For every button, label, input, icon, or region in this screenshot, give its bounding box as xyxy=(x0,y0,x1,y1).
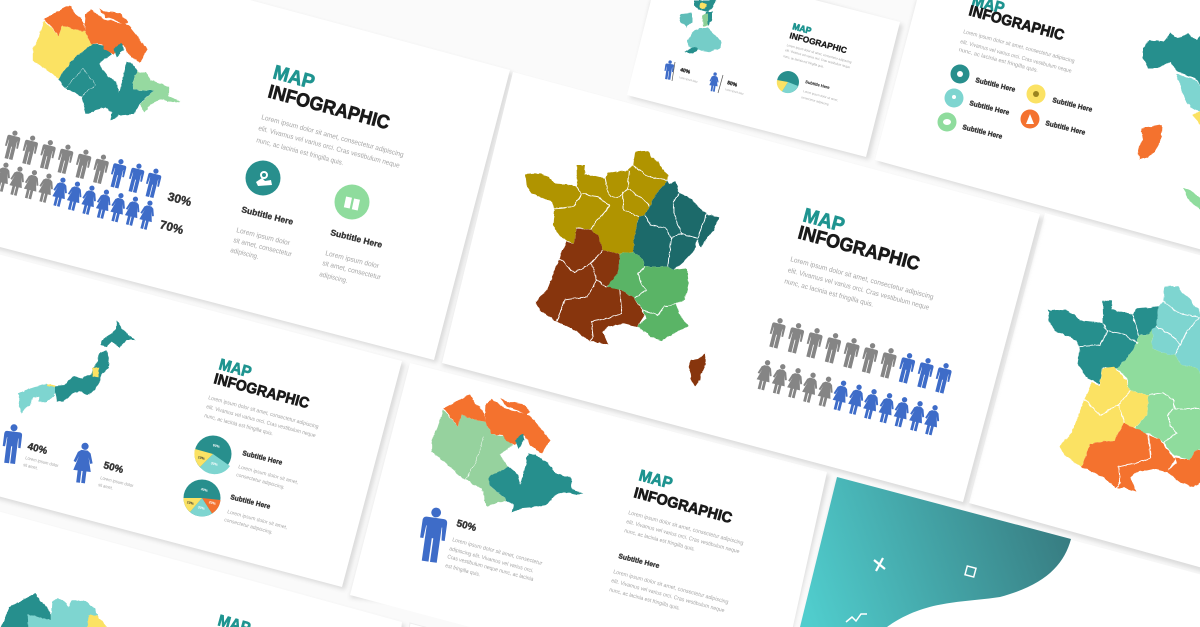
body text: elit. Vivamus vel varius orci. Cras vestibulum neque xyxy=(205,404,316,439)
body left xyxy=(230,227,293,261)
heading INFOGRAPHIC: INFOGRAPHIC xyxy=(632,484,734,527)
pie text: consectetur adipiscing. xyxy=(801,95,830,107)
icon circles xyxy=(938,64,1046,132)
panel: france slide right xyxy=(969,213,1200,574)
divider xyxy=(672,62,675,81)
map: france pastel xyxy=(1048,286,1200,492)
pictogram: women row xyxy=(0,161,157,231)
body left: est fringilla quis. xyxy=(444,563,481,578)
pie chart 2: 40% xyxy=(200,487,209,493)
percent 40%: 40% xyxy=(26,441,49,457)
heading MAP: MAP xyxy=(791,21,812,36)
icon: zigzag xyxy=(846,614,867,622)
heading INFOGRAPHIC: INFOGRAPHIC xyxy=(788,30,848,55)
pie chart 2: 20% xyxy=(208,500,217,506)
panel: small slide bottom xyxy=(405,623,530,627)
body left: adipiscing. xyxy=(230,247,259,261)
body text: nunc, ac lacinia est fringilla quis. xyxy=(203,413,274,437)
body left: sit amet, consectetur xyxy=(233,237,293,259)
body left: Lorem ipsum dolor sit amet, consectetur xyxy=(451,537,543,567)
body text: elit. Vivamus vel varius orci. Cras vestibulum neque xyxy=(959,39,1072,75)
pie chart 1: 60% xyxy=(212,443,221,449)
percent 50%: 50% xyxy=(455,518,478,534)
body left: Cras vestibulum neque nunc, ac lacinia xyxy=(446,554,535,583)
heading INFOGRAPHIC: INFOGRAPHIC xyxy=(266,82,392,134)
body text: elit. Vivamus vel varius orci. Cras vestibulum neque xyxy=(787,267,930,312)
panel: bottom left slide xyxy=(0,509,405,627)
percent 50%: 50% xyxy=(726,80,738,89)
body text: nunc, ac lacinia est fringilla quis. xyxy=(623,528,696,553)
map: uk xyxy=(680,0,721,54)
map: france regions xyxy=(525,151,719,387)
body text: Lorem ipsum dolor sit amet, consectetur adipiscing xyxy=(962,29,1075,65)
icon: cross xyxy=(874,558,885,571)
icon: man xyxy=(663,60,675,80)
panel: uk slide xyxy=(627,0,903,160)
body left: Lorem ipsum dolor xyxy=(236,227,291,247)
heading INFOGRAPHIC: INFOGRAPHIC xyxy=(796,223,922,275)
caption: Lorem ipsum dolor xyxy=(725,87,744,96)
caption: Lorem ipsum dolor xyxy=(100,475,134,488)
body lower: elit. Vivamus vel varius orci. Cras vestibulum neque xyxy=(610,578,725,614)
body text: elit. Vivamus vel varius orci. Cras vestibulum neque xyxy=(257,125,400,170)
subtitles: Subtitle Here xyxy=(975,77,1016,94)
pie chart xyxy=(777,71,799,93)
icon: woman xyxy=(71,442,95,484)
percent: 70%: 70% xyxy=(158,217,185,237)
body text: Lorem ipsum dolor sit amet, consectetur adipiscing xyxy=(260,114,404,159)
panel: italy slide xyxy=(875,0,1200,255)
subtitles: Subtitle Here xyxy=(1045,120,1086,137)
caption: sit amet. xyxy=(98,482,114,491)
subtitles: Subtitle Here xyxy=(969,100,1010,117)
pie 2 text: consectetur adipiscing. xyxy=(223,517,273,536)
subtitle: Subtitle Here xyxy=(618,553,660,570)
percent 40%: 40% xyxy=(679,67,691,76)
subtitles: Subtitle Here xyxy=(962,124,1003,141)
percent 50%: 50% xyxy=(102,460,125,476)
icon: diamond xyxy=(965,566,976,577)
icon: man xyxy=(1,423,23,464)
body text: nunc, ac lacinia est fringilla quis. xyxy=(783,54,824,69)
panel: japan slide xyxy=(0,252,405,590)
subtitle right: Subtitle Here xyxy=(330,227,384,250)
body left: adipiscing elit. Vivamus vel varius orci. xyxy=(448,546,534,575)
body left xyxy=(444,537,543,583)
map: canada cropped xyxy=(0,593,115,627)
icon: man xyxy=(417,506,449,563)
body text: Lorem ipsum dolor sit amet, consectetur adipiscing xyxy=(627,510,744,547)
pictogram: women row xyxy=(754,358,943,436)
body text: elit. Vivamus vel varius orci. Cras vestibulum neque xyxy=(625,519,740,555)
subtitle 2: Subtitle Here xyxy=(230,494,271,511)
pie chart 1: 30% xyxy=(210,461,219,467)
body text: nunc, ac lacinia est fringilla quis. xyxy=(958,47,1039,74)
body lower: Lorem ipsum dolor sit amet, consectetur adipiscing xyxy=(612,569,729,606)
shape: gradient wave xyxy=(800,477,1071,627)
heading INFOGRAPHIC: INFOGRAPHIC xyxy=(967,2,1066,44)
body right: adipiscing. xyxy=(319,271,348,285)
pie chart 1 xyxy=(194,436,232,474)
percent: 30%: 30% xyxy=(166,189,193,209)
map: italy xyxy=(1138,33,1200,212)
subtitles: Subtitle Here xyxy=(1052,97,1093,114)
body text: Lorem ipsum dolor sit amet, consectetur adipiscing xyxy=(207,395,319,430)
caption: sit amet. xyxy=(23,462,39,471)
map: canada multi colour xyxy=(33,5,180,120)
body right xyxy=(319,250,382,285)
panel: teal cover slide xyxy=(800,477,1200,627)
body right: Lorem ipsum dolor xyxy=(325,250,380,270)
pie chart 2: 10% xyxy=(186,500,195,506)
body text: Lorem ipsum dolor sit amet, consectetur adipiscing xyxy=(786,43,852,64)
pie 1 text: Lorem ipsum dolor sit amet, xyxy=(237,464,299,486)
subtitle 1: Subtitle Here xyxy=(242,450,283,467)
heading MAP: MAP xyxy=(801,205,847,237)
subtitles xyxy=(962,77,1093,141)
pie chart 2: 30% xyxy=(197,505,206,511)
body lower: nunc, ac lacinia est fringilla quis. xyxy=(608,587,681,612)
heading MAP: MAP xyxy=(217,356,254,381)
panel: canada slide bottom xyxy=(350,363,830,627)
divider xyxy=(718,75,723,93)
pie 1 text: consectetur adipiscing. xyxy=(235,472,285,491)
pie text: Lorem ipsum dolor sit amet, xyxy=(803,89,839,102)
icon: woman xyxy=(708,72,720,92)
pictogram: men row xyxy=(767,316,953,394)
map: japan xyxy=(18,321,135,413)
icon: map pin circle xyxy=(246,160,280,196)
heading MAP: MAP xyxy=(271,62,317,94)
subtitle left: Subtitle Here xyxy=(241,204,295,227)
panel: central france slide xyxy=(442,72,1043,506)
body text: Lorem ipsum dolor sit amet, consectetur adipiscing xyxy=(789,256,934,301)
heading MAP: MAP xyxy=(637,467,675,493)
body text: nunc, ac lacinia est fringilla quis. xyxy=(255,137,344,167)
caption: Lorem ipsum dolor xyxy=(25,455,59,468)
map: canada green orange teal xyxy=(432,394,583,513)
body right: sit amet, consectetur xyxy=(322,260,382,282)
subtitle: Subtitle Here xyxy=(805,79,831,90)
pie 2 text: Lorem ipsum dolor sit amet, xyxy=(226,509,288,531)
panel: canada slide top left xyxy=(0,0,513,363)
pie chart 2 xyxy=(184,480,220,516)
icon: suitcases circle xyxy=(334,184,370,220)
pie chart 1: 10% xyxy=(197,455,206,461)
heading INFOGRAPHIC: INFOGRAPHIC xyxy=(212,370,311,412)
pictogram: men row xyxy=(2,129,163,199)
body text: nunc, ac lacinia est fringilla quis. xyxy=(783,278,874,309)
caption: Lorem ipsum dolor xyxy=(679,75,698,84)
body text: elit. Vivamus vel varius orci. Cras vestibulum neque xyxy=(785,48,851,69)
